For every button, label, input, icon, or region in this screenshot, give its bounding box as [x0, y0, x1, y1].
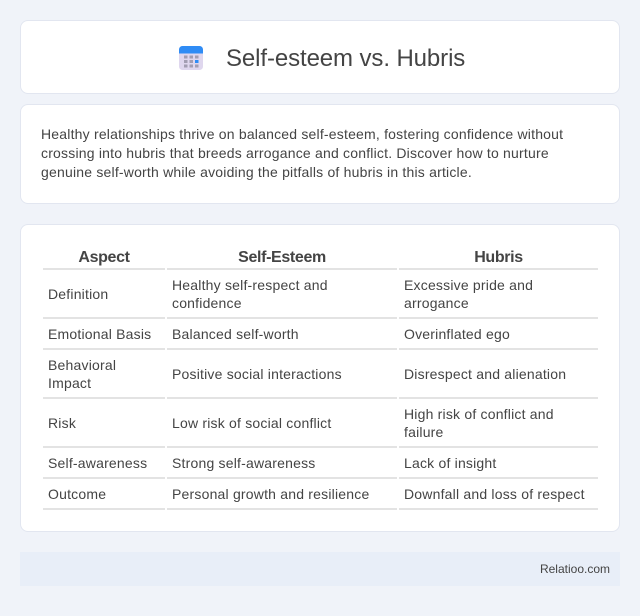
text block: introduction: genuine self-worth while avoiding the pitfalls of hubris in this article. [41, 164, 472, 180]
row: emotional basis: Overinflated ego [404, 326, 510, 342]
text block: introduction: Healthy relationships thrive on balanced self-esteem, fostering confidence without [41, 126, 563, 142]
row: definition [43, 277, 598, 319]
row: definition: Excessive pride and [404, 277, 533, 293]
row: definition: Healthy self-respect and [172, 277, 328, 293]
footer [20, 552, 620, 586]
panel: comparison table [20, 224, 620, 532]
row: emotional basis [43, 326, 598, 350]
row: emotional basis: Emotional Basis [48, 326, 151, 342]
row: self-awareness [43, 455, 598, 479]
table header row [43, 249, 598, 270]
icon: calendar [179, 46, 203, 70]
row: outcome: Personal growth and resilience [172, 486, 369, 502]
row: definition: Definition [48, 286, 108, 302]
row: risk: Risk [48, 415, 76, 431]
table header row: Self-Esteem [238, 249, 326, 266]
row: behavioral impact [43, 357, 598, 399]
row: outcome: Downfall and loss of respect [404, 486, 585, 502]
panel: introduction [20, 104, 620, 204]
row: behavioral impact: Impact [48, 375, 91, 391]
table header row: Aspect [78, 249, 130, 266]
row: outcome [43, 486, 598, 510]
panel: header [20, 20, 620, 94]
row: risk: High risk of conflict and [404, 406, 554, 422]
row: emotional basis: Balanced self-worth [172, 326, 299, 342]
table header row: Hubris [474, 249, 523, 266]
title: Self-esteem vs. Hubris [226, 45, 465, 72]
row: self-awareness: Strong self-awareness [172, 455, 316, 471]
row: behavioral impact: Positive social interactions [172, 366, 342, 382]
row: risk [43, 406, 598, 448]
row: risk: failure [404, 424, 444, 440]
row: self-awareness: Self-awareness [48, 455, 147, 471]
text block: introduction [41, 126, 563, 180]
row: behavioral impact: Disrespect and alienation [404, 366, 566, 382]
row: self-awareness: Lack of insight [404, 455, 496, 471]
row: outcome: Outcome [48, 486, 106, 502]
footer credit: Relatioo.com [540, 562, 610, 576]
text block: introduction: crossing into hubris that breeds arrogance and conflict. Discover how to nurture [41, 145, 549, 161]
row: definition: arrogance [404, 295, 469, 311]
row: behavioral impact: Behavioral [48, 357, 116, 373]
row: risk: Low risk of social conflict [172, 415, 331, 431]
row: definition: confidence [172, 295, 242, 311]
